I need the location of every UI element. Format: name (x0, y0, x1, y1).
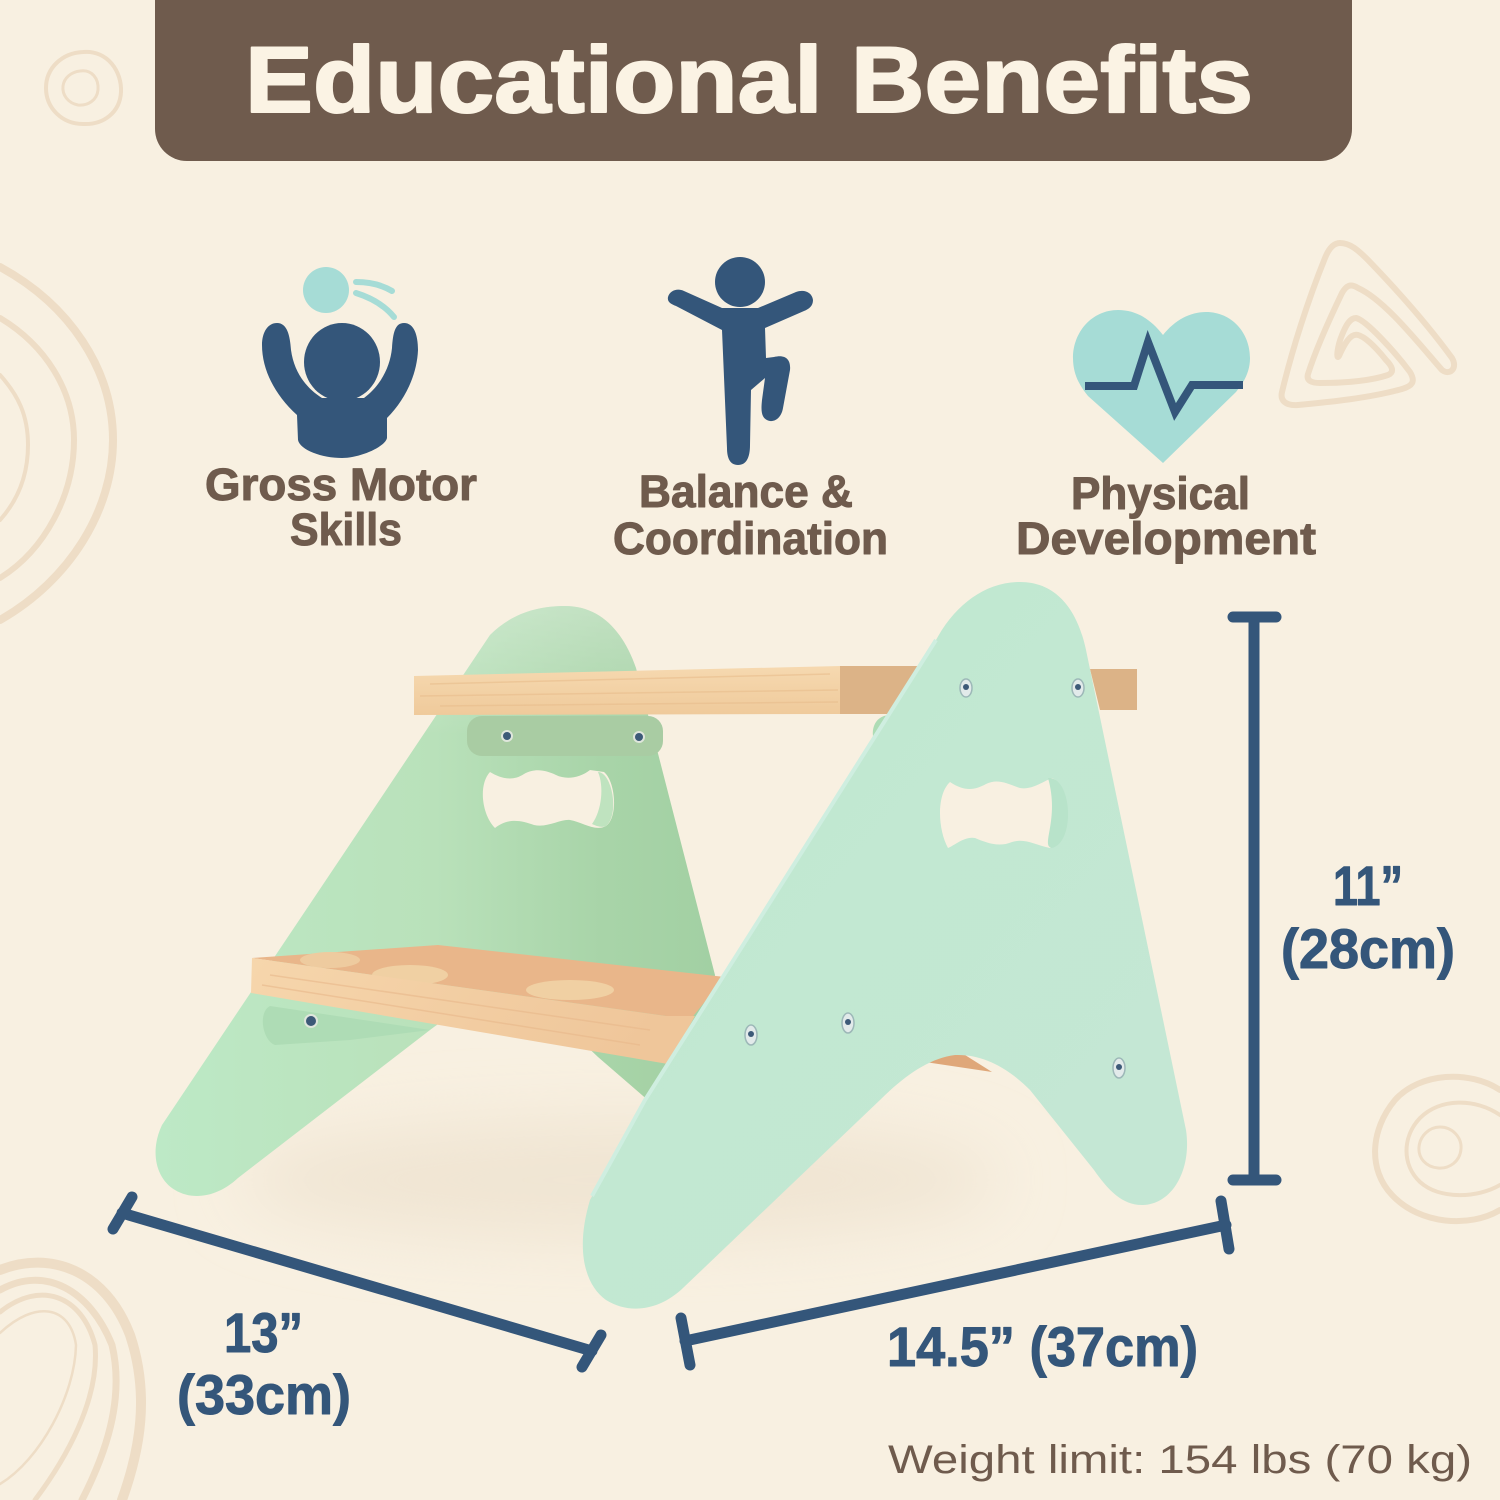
benefit: gross motor skills (205, 267, 477, 555)
upper step (414, 666, 1137, 746)
width label: 14.5” (37cm) (887, 1315, 1198, 1378)
rear lower step, seen through the notch (925, 1055, 992, 1072)
floor shadow (240, 1120, 1000, 1240)
front leg edge highlight (592, 640, 936, 1196)
dimension: width (681, 1201, 1229, 1378)
label: balance and coordination: Coordination (613, 513, 888, 564)
handle bevel: back leg (592, 772, 613, 827)
decoration: triangle spiral (1282, 243, 1454, 405)
benefit: balance and coordination (613, 257, 888, 564)
label: gross motor skills: Gross Motor (205, 459, 477, 510)
lower step (251, 945, 992, 1072)
plate screws (502, 731, 644, 742)
icon: child catching ball (262, 267, 418, 458)
label: gross motor skills (205, 459, 477, 555)
screw centres (748, 684, 1122, 1070)
title banner (155, 0, 1352, 161)
title: Educational Benefits (245, 27, 1253, 132)
height label: (28cm) (1281, 917, 1455, 980)
weight limit note: Weight limit: 154 lbs (70 kg) (888, 1438, 1472, 1482)
height label: 11” (1333, 854, 1403, 917)
label: gross motor skills: Skills (290, 504, 402, 555)
depth label: (33cm) (177, 1363, 351, 1426)
handle bevel: front leg (1048, 778, 1068, 848)
label: physical development: Development (1016, 513, 1316, 564)
front leg (583, 582, 1187, 1309)
decoration: right rings (1375, 1077, 1500, 1221)
upper support plate (467, 716, 663, 756)
decoration: left arcs (0, 267, 113, 620)
label: balance and coordination (613, 466, 888, 564)
depth label (177, 1301, 351, 1426)
label: physical development (1016, 468, 1316, 564)
benefit: physical development (1016, 310, 1316, 564)
front leg screws (745, 679, 1125, 1078)
label: physical development: Physical (1071, 468, 1250, 519)
handle hole: front leg (940, 778, 1067, 848)
decoration: top-left ring (46, 52, 121, 124)
icon: figure balancing on one leg (668, 257, 813, 465)
dimension: depth (113, 1197, 601, 1426)
label: balance and coordination: Balance & (639, 466, 853, 517)
step stool (156, 582, 1187, 1309)
decoration: bottom-left arcs (0, 1263, 141, 1500)
dimension: height (1233, 617, 1455, 1180)
handle hole: back leg (483, 770, 614, 828)
back leg (156, 606, 715, 1196)
lower support plate (263, 1006, 430, 1045)
icon: heart with pulse (1073, 310, 1250, 463)
depth label: 13” (224, 1301, 303, 1364)
height label (1281, 854, 1455, 980)
